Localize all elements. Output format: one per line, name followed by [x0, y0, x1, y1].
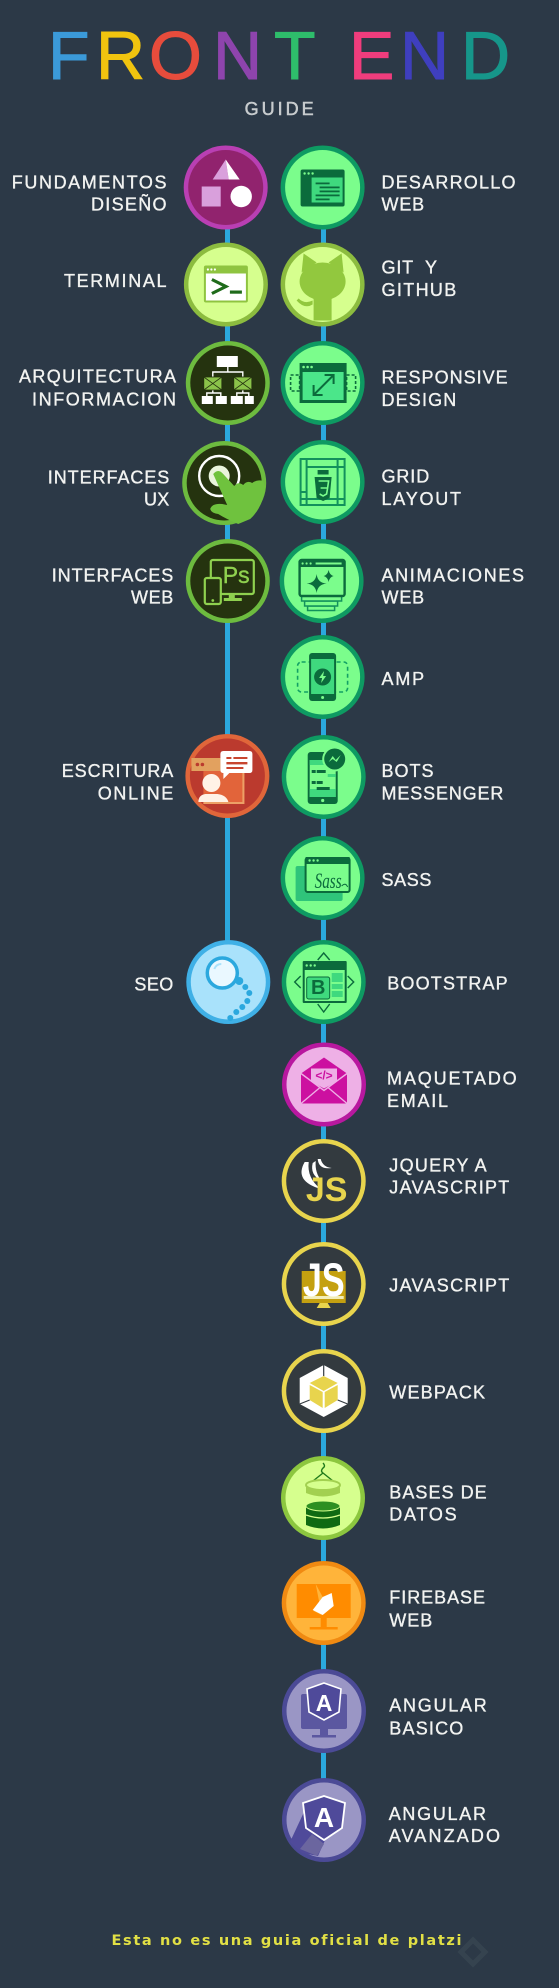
label: amp: AMP [382, 669, 424, 689]
label: bases de datos: BASES DE [389, 1482, 487, 1502]
footer note: Esta no es una guia oficial de platzi [112, 1933, 462, 1949]
label: escritura online: ESCRITURA [62, 761, 173, 781]
label: responsive design [382, 368, 508, 410]
icon: animation window [280, 539, 364, 623]
icon: jquery js: JS [306, 1171, 347, 1209]
label: desarrollo web [382, 172, 516, 215]
icon: photoshop devices [186, 539, 270, 623]
icon: angular shield: A [314, 1802, 334, 1833]
icon: sass window [281, 836, 365, 920]
title: O [149, 18, 202, 94]
label: arquitectura informacion [19, 367, 176, 409]
label: interfaces ux [48, 467, 169, 510]
icon: sass window: Sass [315, 868, 342, 893]
node: interfaces ux [48, 441, 266, 525]
icon: angular shield [282, 1778, 366, 1862]
label: desarrollo web: WEB [382, 195, 424, 215]
icon: angular monitor [282, 1669, 366, 1753]
icon: css3 grid [281, 440, 365, 524]
label: webpack: WEBPACK [389, 1382, 485, 1402]
icon: sitemap [186, 341, 270, 425]
label: bases de datos: DATOS [389, 1505, 457, 1525]
node: git y github [281, 242, 456, 326]
node: bases de datos [281, 1456, 487, 1540]
title: N [213, 18, 262, 94]
icon: photoshop devices: Ps [223, 562, 250, 588]
label: interfaces ux: UX [144, 490, 169, 510]
label: arquitectura informacion: INFORMACION [32, 389, 176, 409]
label: grid layout [382, 467, 461, 509]
title [48, 18, 510, 94]
label: bots messenger [382, 761, 503, 803]
label: firebase web: FIREBASE [389, 1588, 485, 1608]
label: fundamentos diseño: FUNDAMENTOS [12, 172, 166, 192]
title: D [461, 18, 510, 94]
node: sass [281, 836, 431, 920]
icon: online writing [185, 734, 269, 818]
label: maquetado email: EMAIL [387, 1091, 448, 1111]
label: bots messenger: BOTS [382, 761, 434, 781]
icon: amp phone [281, 635, 365, 719]
label: jquery a javascript [389, 1155, 509, 1198]
node: fundamentos diseño [12, 146, 268, 230]
icon: angular monitor: A [316, 1690, 332, 1716]
label: git y github [382, 258, 456, 300]
label: grid layout: GRID [382, 467, 429, 487]
icon: github octocat [281, 242, 365, 326]
label: interfaces web: WEB [131, 588, 173, 608]
node: arquitectura informacion [19, 341, 270, 425]
icon: webpack cube [282, 1349, 366, 1433]
label: angular avanzado: AVANZADO [389, 1826, 500, 1846]
icon: watermark [461, 1940, 485, 1964]
label: sass: SASS [382, 870, 431, 890]
icon: responsive window [281, 341, 365, 425]
label: bootstrap: BOOTSTRAP [387, 973, 508, 993]
node: amp [281, 635, 424, 719]
label: maquetado email [387, 1068, 517, 1111]
node: grid layout [281, 440, 461, 524]
icon: code window [281, 146, 365, 230]
label: fundamentos diseño: DISEÑO [91, 194, 166, 215]
label: angular avanzado [389, 1804, 500, 1846]
title: F [48, 18, 90, 94]
label: angular avanzado: ANGULAR [389, 1804, 486, 1824]
label: angular basico: BASICO [389, 1718, 463, 1738]
node: webpack [282, 1349, 485, 1433]
icon: shapes [184, 146, 268, 230]
label: animaciones web [382, 565, 524, 608]
label: escritura online: ONLINE [98, 783, 173, 803]
node: interfaces web [52, 539, 270, 623]
label: responsive design: RESPONSIVE [382, 368, 508, 388]
title: N [400, 18, 449, 94]
title: E [349, 18, 394, 94]
label: interfaces web: INTERFACES [52, 565, 173, 585]
node: bots messenger [282, 735, 503, 819]
label: javascript: JAVASCRIPT [389, 1275, 509, 1295]
label: interfaces ux: INTERFACES [48, 467, 169, 487]
icon: messenger phone [282, 735, 366, 819]
label: escritura online [62, 761, 173, 803]
icon: javascript monitor: JS [303, 1253, 345, 1306]
label: angular basico [389, 1696, 487, 1738]
label: firebase web [389, 1588, 485, 1630]
node: angular avanzado [282, 1778, 500, 1862]
label: jquery a javascript: JAVASCRIPT [389, 1178, 509, 1198]
node: javascript [282, 1242, 509, 1326]
icon: firebase monitor [282, 1561, 366, 1645]
node: escritura online [62, 734, 269, 818]
icon: javascript monitor [282, 1242, 366, 1326]
label: maquetado email: MAQUETADO [387, 1068, 517, 1088]
node: angular basico [282, 1669, 487, 1753]
label: desarrollo web: DESARROLLO [382, 172, 516, 192]
icon: database [281, 1456, 365, 1540]
node: responsive design [281, 341, 508, 425]
timeline: right line [321, 225, 326, 1781]
node: firebase web [282, 1561, 485, 1645]
title: R [96, 18, 145, 94]
label: angular basico: ANGULAR [389, 1696, 487, 1716]
label: firebase web: WEB [389, 1610, 432, 1630]
node: animaciones web [280, 539, 524, 623]
label: jquery a javascript: JQUERY A [389, 1155, 487, 1175]
label: terminal: TERMINAL [64, 271, 166, 291]
icon: jquery js [282, 1139, 366, 1223]
label: fundamentos diseño [12, 172, 166, 215]
node: maquetado email [282, 1042, 517, 1126]
icon: email envelope: </> [315, 1068, 333, 1082]
label: bases de datos [389, 1482, 487, 1525]
label: git y github: GIT Y [382, 258, 437, 278]
node: jquery a javascript [282, 1139, 509, 1223]
icon: bootstrap window [282, 940, 366, 1024]
node: terminal [64, 242, 268, 326]
timeline: left line [225, 225, 230, 945]
node: seo [134, 940, 270, 1024]
label: animaciones web: WEB [382, 588, 424, 608]
icon: magnifier [186, 940, 270, 1024]
node: desarrollo web [281, 146, 516, 230]
label: interfaces web [52, 565, 173, 608]
label: animaciones web: ANIMACIONES [382, 565, 524, 585]
subtitle: GUIDE [245, 99, 314, 119]
node: bootstrap [282, 940, 508, 1024]
title: T [274, 18, 316, 94]
label: arquitectura informacion: ARQUITECTURA [19, 367, 176, 387]
icon: bootstrap window: B [311, 977, 325, 999]
label: git y github: GITHUB [382, 280, 456, 300]
label: responsive design: DESIGN [382, 390, 456, 410]
label: seo: SEO [134, 974, 173, 994]
label: grid layout: LAYOUT [382, 489, 461, 509]
icon: terminal window [184, 242, 268, 326]
icon: touch hand [182, 441, 266, 525]
label: bots messenger: MESSENGER [382, 783, 503, 803]
icon: email envelope [282, 1042, 366, 1126]
